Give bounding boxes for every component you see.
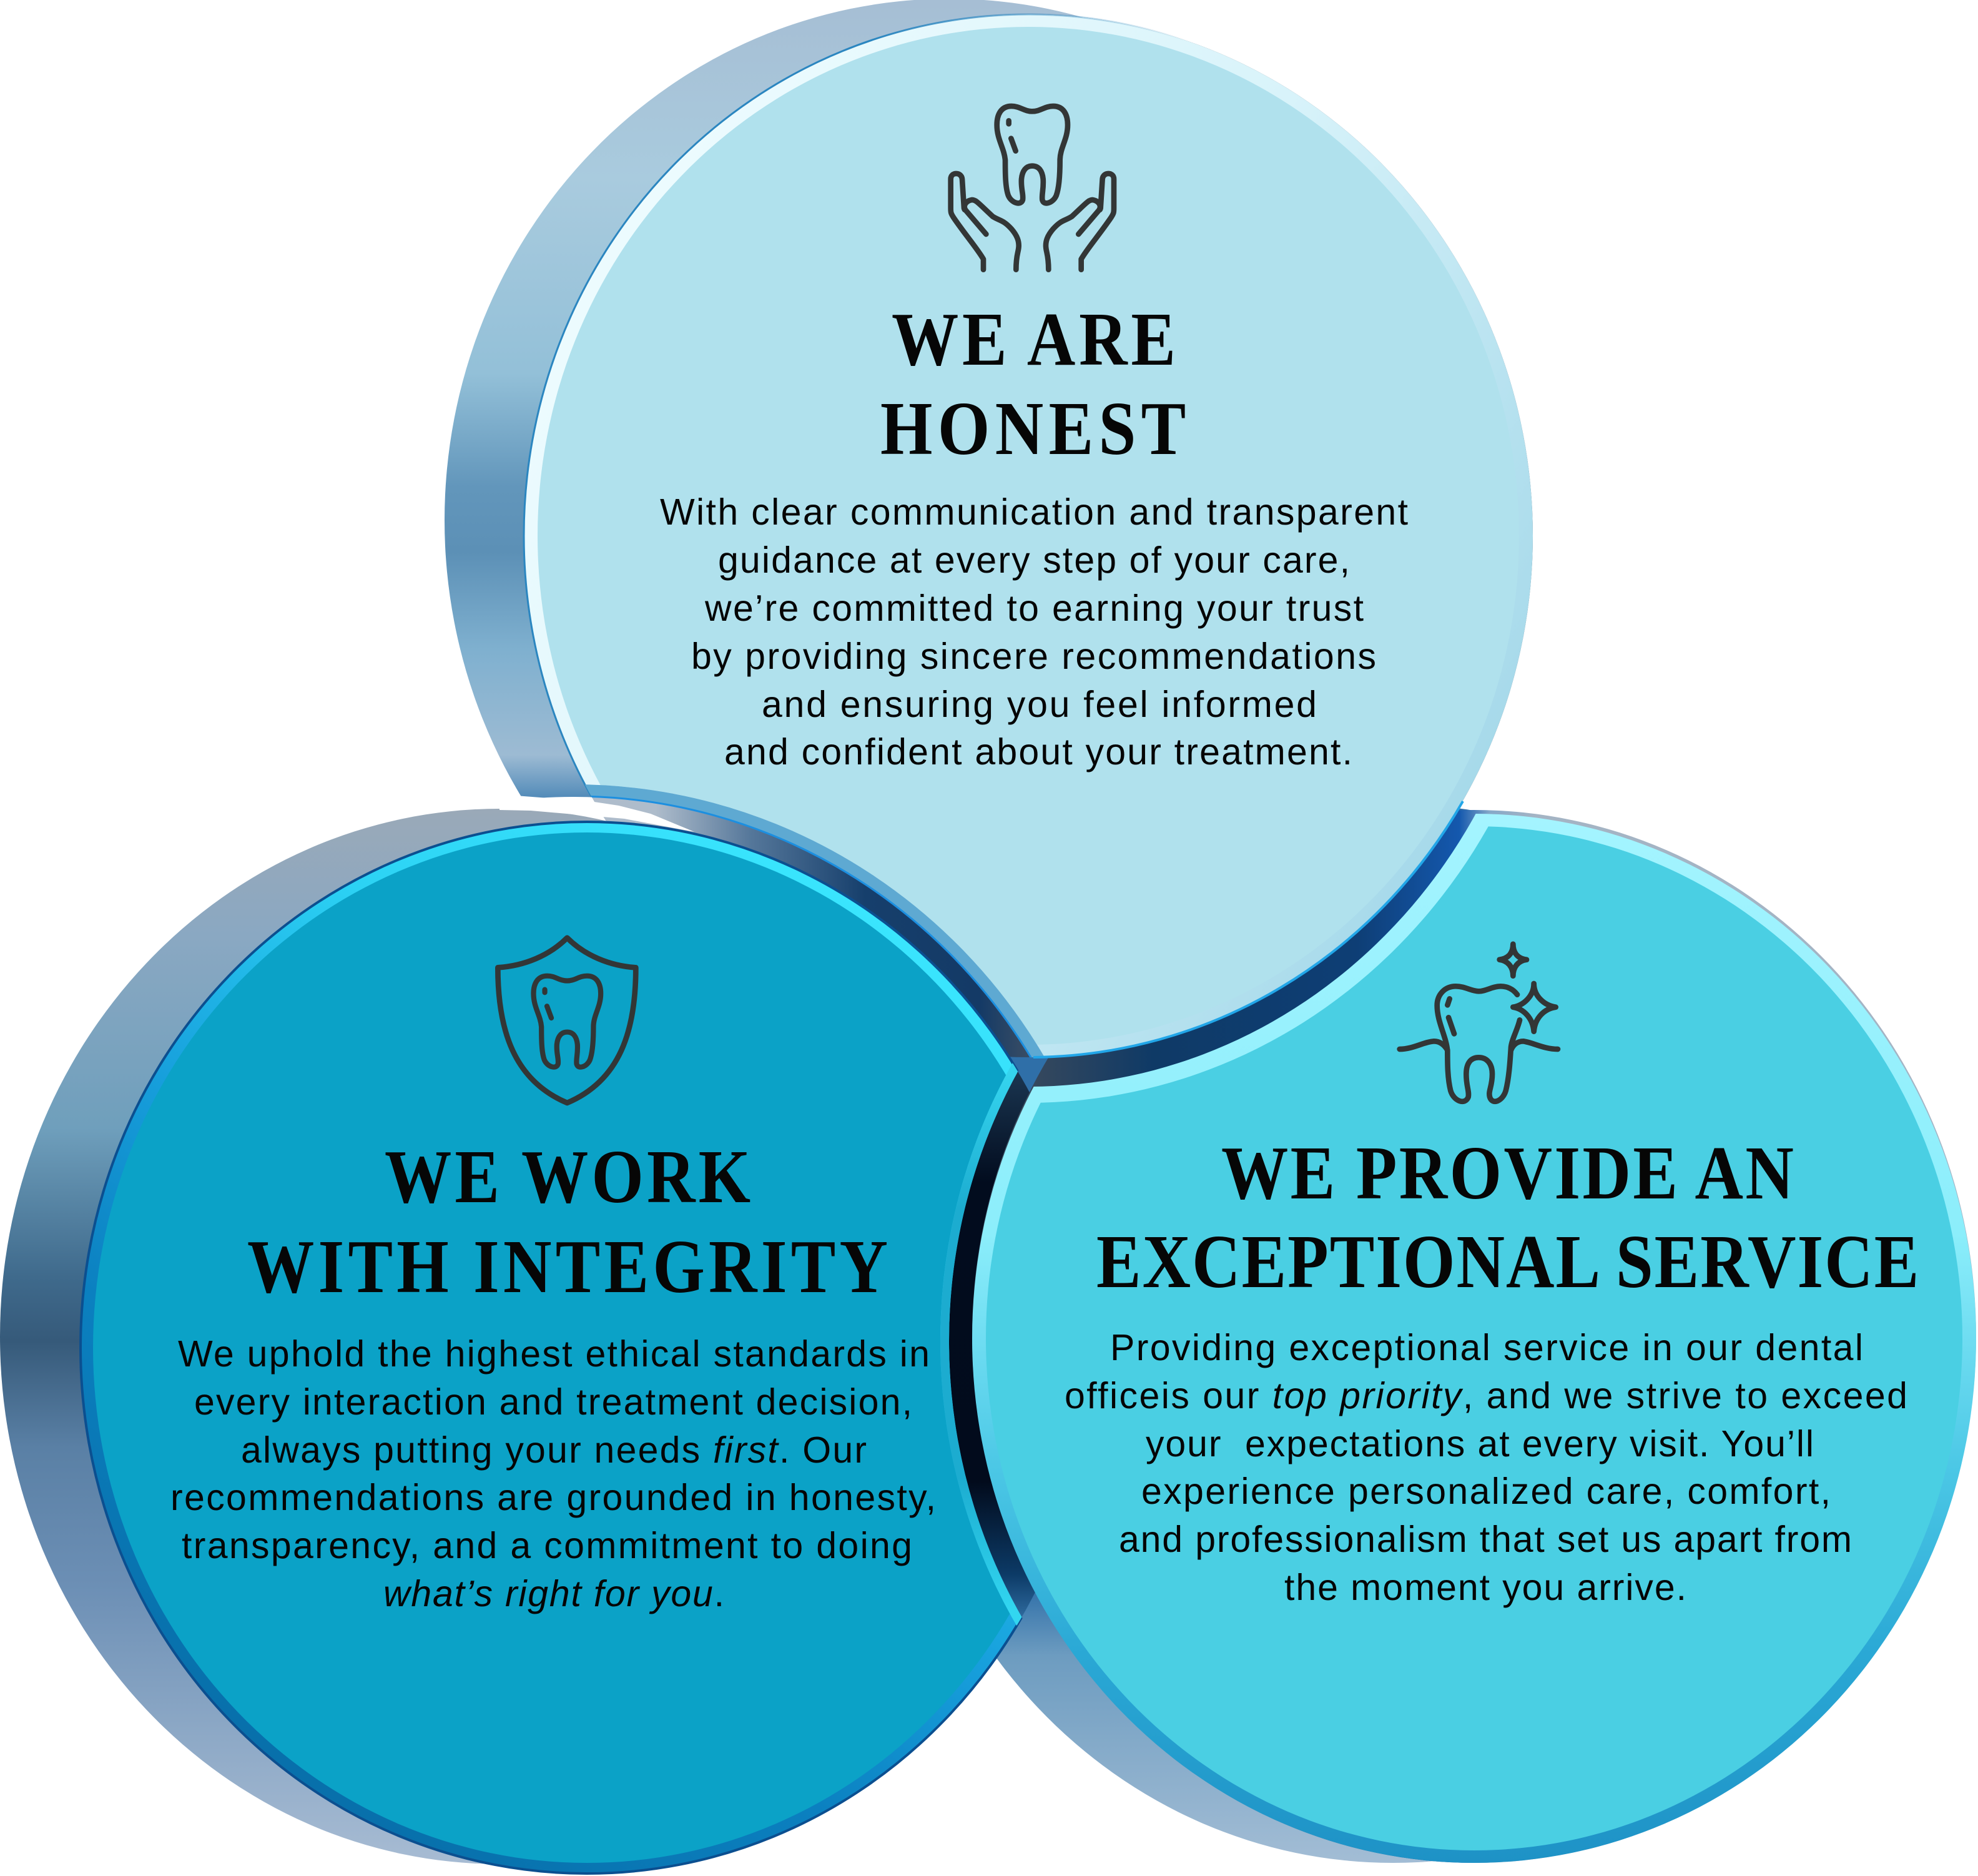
heading: we are honest: WE ARE (892, 297, 1176, 382)
text: integrity description: We uphold the highest ethical standards in (178, 1333, 930, 1375)
text: honesty description: guidance at every step of your care, (718, 540, 1350, 581)
text: honesty description: With clear communication and transparent (660, 491, 1408, 533)
icon: shield with tooth (498, 938, 636, 1103)
icon: sparkling tooth (1400, 944, 1558, 1102)
text: service description: and professionalism that set us apart from (1119, 1519, 1852, 1560)
heading: we are honest: HONEST (880, 387, 1186, 471)
text: honesty description: we’re committed to earning your trust (704, 588, 1364, 629)
text: integrity description: what’s right for you. (383, 1573, 724, 1614)
text: service description: your expectations at every visit. You’ll (1146, 1423, 1814, 1464)
text: honesty description (660, 491, 1408, 773)
icon: hands holding tooth (951, 106, 1114, 270)
text: service description: officeis our top priority, and we strive to exceed (1065, 1375, 1907, 1416)
text: integrity description: always putting your needs first. Our (241, 1429, 867, 1471)
heading: we work with integrity: WE WORK (385, 1135, 750, 1219)
text: honesty description: and confident about your treatment. (724, 731, 1352, 773)
text: service description: the moment you arrive. (1284, 1567, 1686, 1608)
text: integrity description (170, 1333, 936, 1614)
disc extrusions (0, 0, 1471, 1864)
heading: we work with integrity: WITH INTEGRITY (247, 1225, 888, 1309)
text: integrity description: recommendations are grounded in honesty, (170, 1477, 936, 1518)
panel: we work with integrity (79, 821, 1023, 1875)
panel: we provide an exceptional service (972, 814, 1976, 1863)
heading: we provide an exceptional service: EXCEPTIONAL SERVICE (1096, 1220, 1919, 1304)
panel: we are honest (523, 14, 1533, 1059)
heading: we are honest (880, 297, 1186, 471)
text: service description (1065, 1327, 1907, 1608)
text: integrity description: transparency, and a commitment to doing (182, 1525, 912, 1566)
heading: we work with integrity (247, 1135, 888, 1309)
text: honesty description: and ensuring you feel informed (762, 684, 1317, 725)
text: service description: Providing exceptional service in our dental (1110, 1327, 1863, 1368)
text: honesty description: by providing sincere recommendations (691, 636, 1376, 677)
text: service description: experience personalized care, comfort, (1141, 1471, 1831, 1512)
text: integrity description: every interaction and treatment decision, (194, 1381, 912, 1423)
heading: we provide an exceptional service: WE PROVIDE AN (1221, 1131, 1794, 1215)
heading: we provide an exceptional service (1096, 1131, 1919, 1304)
